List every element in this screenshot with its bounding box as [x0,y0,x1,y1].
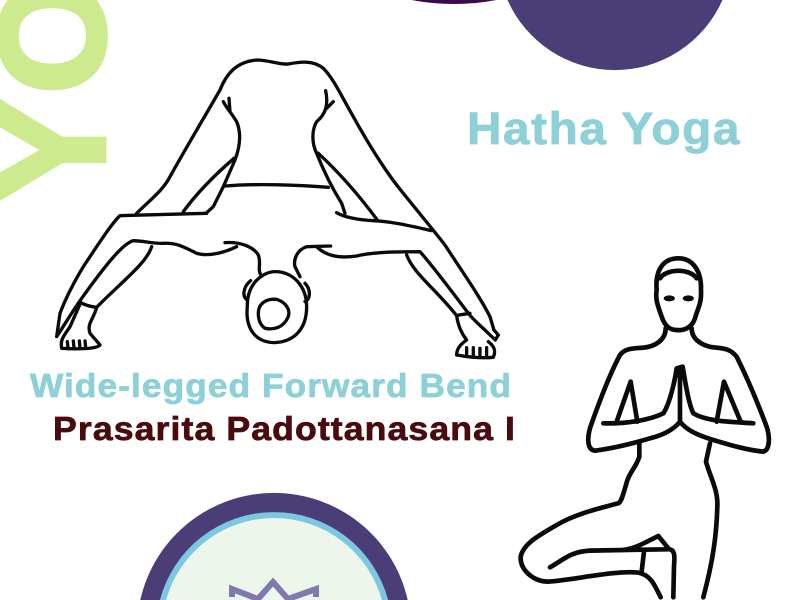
caption: Prasarita Padottanasana I: Prasarita Padottanasana I [53,410,516,447]
hairband [660,271,697,278]
eyes [664,295,694,301]
left arm [57,213,237,337]
foot resting on thigh [623,536,668,572]
badge: lotus circle [140,493,408,600]
outer silhouette of legs and back [137,60,498,340]
right lower leg and foot [407,255,495,358]
gaps between arms and torso [617,382,741,422]
head outline [656,258,701,330]
left torso side and inner thigh [183,98,240,213]
caption: Wide-legged Forward Bend: Wide-legged Forward Bend [30,367,512,404]
praying hands [603,367,753,423]
heading: Hatha Yoga: Hatha Yoga [467,103,741,154]
right foot toes [467,348,487,355]
torso and bent leg [521,443,661,597]
right torso side and inner thigh [313,91,377,220]
badge inner disc [166,518,382,600]
decorative dark circle at top [412,0,496,4]
head [247,272,307,343]
left lower leg and foot [61,247,152,349]
inner line of bent leg [550,549,674,597]
ears [244,281,309,302]
waist line [225,185,328,187]
left foot toes [67,341,86,348]
decorative purple circle at top [508,0,722,70]
right upper arm line [337,213,432,231]
illustration: wide-legged forward bend figure [57,60,498,358]
shoulders and arms [588,328,769,452]
icon: lotus [232,582,316,599]
right side of body [703,443,717,597]
face opening [258,299,289,329]
neck and shoulders [225,243,331,277]
badge outer ring [140,493,408,600]
illustration: tree pose figure [521,258,769,597]
badge blue ring [160,512,388,600]
